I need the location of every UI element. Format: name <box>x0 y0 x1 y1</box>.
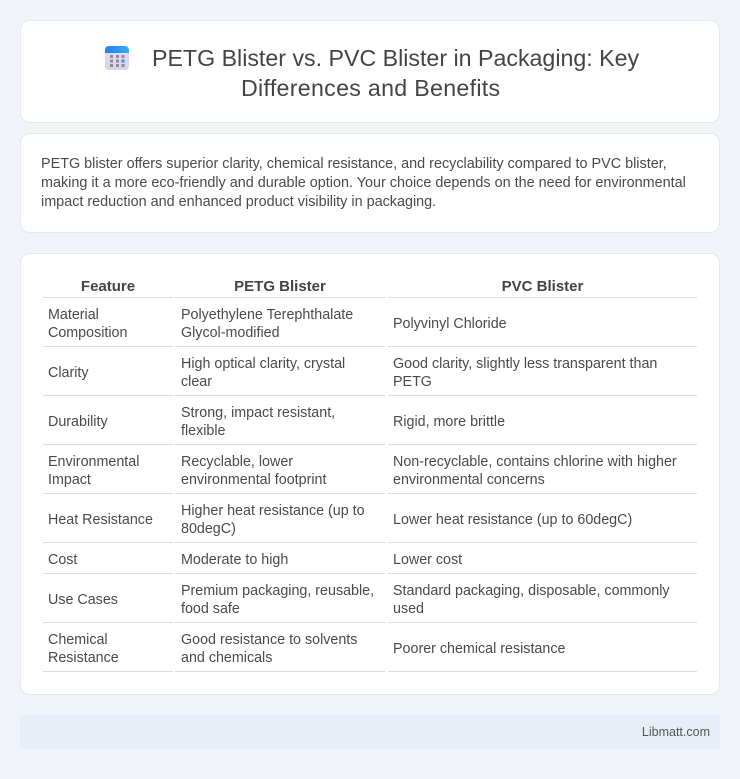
text: clear <box>181 374 212 390</box>
text: Composition <box>48 325 127 341</box>
text: food safe <box>181 601 240 617</box>
text: Lower heat resistance (up to 60degC) <box>393 512 632 528</box>
footer bar <box>20 715 720 749</box>
text: Polyvinyl Chloride <box>393 316 507 332</box>
text: Good clarity, slightly less transparent than <box>393 356 657 372</box>
text: Heat Resistance <box>48 512 153 528</box>
intro text: making it a more eco-friendly and durable option. Your choice depends on the need for environmental <box>41 175 686 191</box>
text: Lower cost <box>393 552 462 568</box>
row: chemical resistance <box>48 632 565 666</box>
text: Clarity <box>48 365 89 381</box>
text: Premium packaging, reusable, <box>181 583 374 599</box>
text: Environmental <box>48 454 139 470</box>
text: High optical clarity, crystal <box>181 356 345 372</box>
text: Cost <box>48 552 77 568</box>
text: Chemical <box>48 632 108 648</box>
text: Use Cases <box>48 592 118 608</box>
title: Differences and Benefits <box>241 74 500 100</box>
text: flexible <box>181 423 226 439</box>
text: Standard packaging, disposable, commonly <box>393 583 670 599</box>
icon: calendar grid <box>105 46 129 70</box>
text: Non-recyclable, contains chlorine with higher <box>393 454 677 470</box>
text: Polyethylene Terephthalate <box>181 307 353 323</box>
text: Strong, impact resistant, <box>181 405 335 421</box>
table panel <box>20 253 720 695</box>
text: PETG <box>393 374 432 390</box>
text: Impact <box>48 472 91 488</box>
text: PETG Blister <box>234 278 326 295</box>
text: Material <box>48 307 99 323</box>
row: cost <box>48 552 462 568</box>
row: heat resistance <box>48 503 632 537</box>
text: and chemicals <box>181 650 272 666</box>
row: environmental impact <box>48 454 677 488</box>
text: Recyclable, lower <box>181 454 293 470</box>
header panel <box>20 20 720 123</box>
row: use cases <box>48 583 670 617</box>
text: environmental concerns <box>393 472 545 488</box>
intro panel <box>20 133 720 233</box>
text: 80degC) <box>181 521 236 537</box>
text: Rigid, more brittle <box>393 414 505 430</box>
text: used <box>393 601 424 617</box>
text: Durability <box>48 414 108 430</box>
text: Moderate to high <box>181 552 288 568</box>
intro text: PETG blister offers superior clarity, chemical resistance, and recyclability compared to PVC blister, <box>41 156 667 172</box>
title <box>152 45 639 100</box>
table header <box>81 278 584 295</box>
text: Resistance <box>48 650 119 666</box>
text: environmental footprint <box>181 472 326 488</box>
text: Poorer chemical resistance <box>393 641 565 657</box>
text: Glycol-modified <box>181 325 280 341</box>
row: clarity <box>48 356 657 390</box>
footer text: Libmatt.com <box>642 725 710 739</box>
text: Higher heat resistance (up to <box>181 503 365 519</box>
text: Good resistance to solvents <box>181 632 357 648</box>
intro text: impact reduction and enhanced product visibility in packaging. <box>41 194 436 210</box>
text: Feature <box>81 278 135 295</box>
intro text <box>41 156 686 210</box>
row: material composition <box>48 307 507 341</box>
row: durability <box>48 405 505 439</box>
title: PETG Blister vs. PVC Blister in Packaging: Key <box>152 45 639 71</box>
text: PVC Blister <box>502 278 583 295</box>
